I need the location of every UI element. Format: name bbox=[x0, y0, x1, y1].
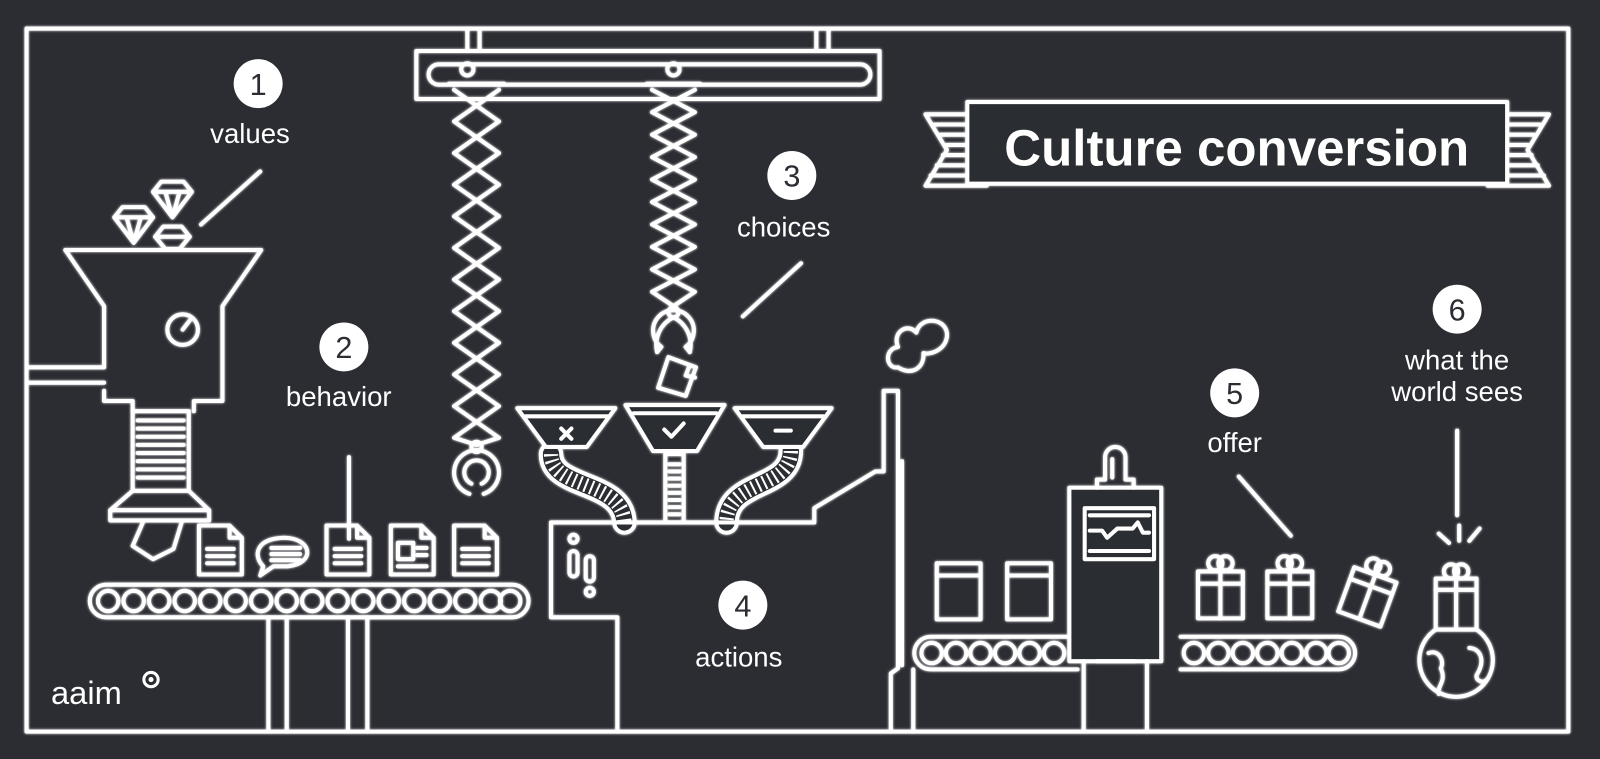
step 4: actions bbox=[695, 641, 782, 672]
step 3: choices bbox=[737, 212, 830, 243]
step 1: values bbox=[210, 118, 290, 149]
step 2: 2 bbox=[335, 331, 352, 365]
gems bbox=[114, 182, 192, 249]
step 4: 4 bbox=[734, 589, 751, 623]
scanning machine bbox=[1069, 447, 1161, 732]
pointer lines bbox=[201, 171, 1457, 539]
left chain with ring bbox=[449, 84, 504, 494]
step 6 bbox=[1390, 285, 1523, 407]
documents bbox=[199, 526, 497, 576]
gifts bbox=[1198, 553, 1402, 627]
title: Culture conversion bbox=[1004, 119, 1469, 176]
right conveyor bbox=[913, 637, 1355, 732]
crane rail bbox=[416, 29, 880, 99]
logo aaim: aaim bbox=[51, 674, 122, 711]
hopper machine bbox=[27, 250, 261, 559]
paper in claw bbox=[658, 357, 696, 396]
right chain with claw bbox=[647, 84, 700, 352]
step 5 bbox=[1207, 368, 1262, 458]
funnels and hoses bbox=[517, 405, 832, 522]
step 3 bbox=[737, 151, 830, 243]
step 1 bbox=[210, 59, 290, 149]
step 1: 1 bbox=[250, 68, 267, 102]
globe with gift bbox=[1419, 526, 1493, 697]
step 2 bbox=[286, 322, 392, 412]
factory building bbox=[551, 391, 898, 732]
step 4 bbox=[695, 581, 782, 672]
step 6: what the bbox=[1404, 344, 1509, 375]
boxes bbox=[937, 563, 1051, 619]
levers icon bbox=[569, 535, 594, 596]
step 3: 3 bbox=[783, 160, 800, 194]
smoke cloud bbox=[888, 321, 947, 371]
step 2: behavior bbox=[286, 381, 392, 412]
title banner bbox=[926, 102, 1549, 186]
left conveyor bbox=[90, 585, 529, 732]
step 5: 5 bbox=[1226, 377, 1243, 411]
step 6: world sees bbox=[1390, 376, 1523, 407]
step 5: offer bbox=[1207, 427, 1262, 458]
logo aaim bbox=[51, 672, 158, 711]
step 6: 6 bbox=[1449, 293, 1466, 327]
